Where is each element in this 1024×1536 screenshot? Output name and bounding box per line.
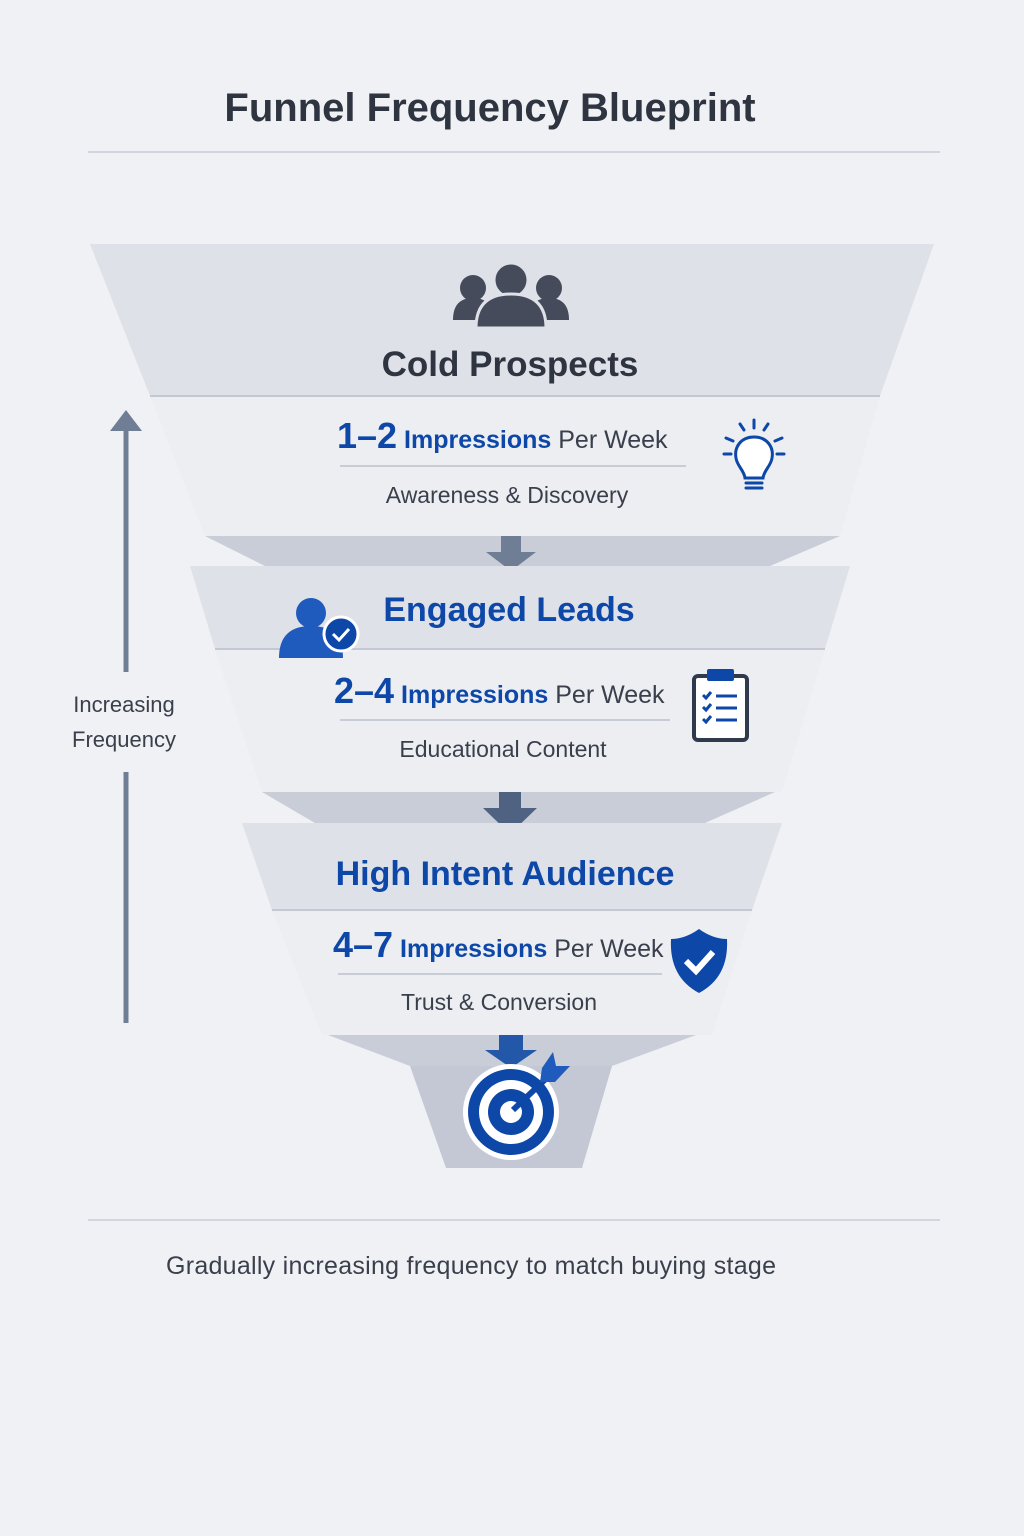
frequency: 1–2 Impressions Per Week <box>337 415 668 456</box>
tier 2: engaged leads: Educational Content <box>399 736 607 762</box>
connector 1 with arrow <box>205 536 840 571</box>
tier 3: high intent: High Intent Audience <box>336 855 674 893</box>
connector 3 and bottom target <box>328 1035 696 1168</box>
icon: user check <box>279 598 358 658</box>
icon: target <box>463 1052 570 1160</box>
tier 3: high intent: Trust & Conversion <box>401 989 597 1015</box>
heading: Cold Prospects <box>382 345 638 384</box>
title: Funnel Frequency Blueprint <box>224 86 756 130</box>
tier 1: cold prospects: Awareness & Discovery <box>386 482 629 508</box>
tier 3: high intent <box>242 823 782 1035</box>
tier 2: engaged leads <box>190 566 850 792</box>
arrow: increasing frequency <box>72 410 176 1023</box>
icon: lightbulb <box>724 420 784 488</box>
connector 2 with arrow <box>262 792 775 834</box>
arrow: increasing frequency: Increasing <box>73 692 175 717</box>
icon: clipboard <box>694 669 747 740</box>
tier 3: high intent: 4–7 Impressions Per Week <box>333 924 664 965</box>
footer caption: Gradually increasing frequency to match buying stage <box>166 1252 776 1280</box>
icon: shield <box>671 929 727 993</box>
heading: Engaged Leads <box>383 591 635 629</box>
arrow: increasing frequency: Frequency <box>72 727 176 752</box>
tier 1: cold prospects <box>90 244 934 536</box>
icon: people <box>453 263 569 328</box>
tier 2: engaged leads: 2–4 Impressions Per Week <box>334 670 665 711</box>
